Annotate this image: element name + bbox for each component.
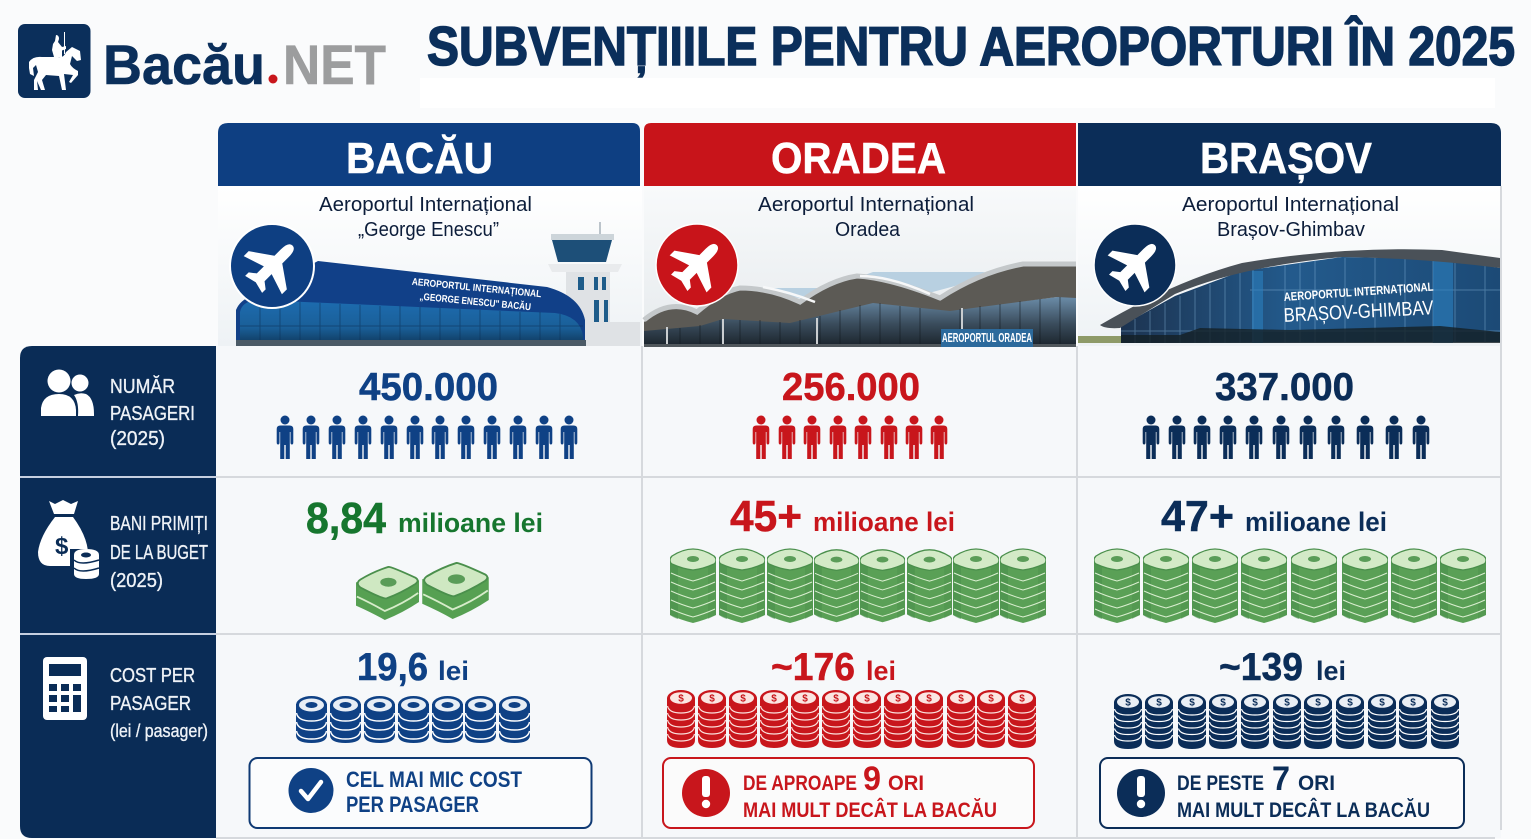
icon: check mark [288,768,334,813]
pictogram: coin stacks [296,696,530,743]
amount: 8,84 milioane lei: milioane lei [398,508,543,538]
number: 337.000 passengers: 337.000 [1215,366,1354,409]
amount: ~176 lei: lei [866,656,896,686]
text: Cost per pasager: COST PER [110,665,195,687]
text: Număr pasageri: PASAGERI [110,403,195,425]
text: building sign: AEROPORTUL INTERNAȚIONAL [411,277,542,300]
text: airport name: Aeroportul Internațional [758,194,974,216]
icon: horse and rider badge [18,24,90,98]
pictogram: coin stacks [1114,694,1459,749]
pictogram: coin stacks [667,690,1036,748]
text: lowest cost: CEL MAI MIC COST [346,767,522,792]
amount: 47+ milioane lei: 47+ [1161,492,1234,541]
row label: budget money [38,500,208,592]
text: Număr pasageri: (2025) [110,428,165,450]
pictogram: money stacks [670,549,1046,623]
heading: BACĂU: BACĂU [346,133,493,183]
text: building sign: AEROPORTUL INTERNAȚIONAL [1283,280,1434,304]
logo wordmark: NET [283,33,386,96]
text: building sign: BRAȘOV-GHIMBAV [1283,297,1435,327]
amount: 19,6 lei: lei [438,656,469,686]
text: Bani primiți de la buget [110,513,208,592]
icon: people [41,370,94,416]
amount: ~139 lei: ~139 [1219,646,1303,689]
text: nearly 9 times more: DE APROAPE [743,772,857,795]
logo wordmark [103,33,386,96]
row label: cost per passenger [43,657,208,741]
icon: airplane [656,224,738,306]
heading: ORADEA: ORADEA [771,134,946,183]
column: Bacău data [250,366,592,828]
text: more than 7 times: DE PESTE [1177,772,1264,795]
text: Bani primiți de la buget: BANI PRIMIȚI [110,513,208,535]
text: Cost per pasager: (lei / pasager) [110,721,208,741]
amount: 45+ milioane lei: milioane lei [813,507,955,537]
text: airport name [758,194,974,241]
icon: money bag: $ [55,533,69,560]
logo wordmark: Bacău [103,33,265,96]
amount: ~139 lei: lei [1316,656,1346,686]
number: 450.000 passengers: 450.000 [359,366,498,409]
pictogram: 12 passengers [277,416,577,459]
panel: Oradea column header and photo [644,123,1076,347]
text: airport name [1182,194,1399,241]
column: Brașov data [1094,366,1486,828]
text: Cost per pasager: PASAGER [110,693,191,715]
heading: BRAȘOV [1078,123,1501,186]
text: nearly 9 times more: ORI [888,772,924,795]
text: airport name: Brașov-Ghimbav [1217,219,1365,241]
heading: BRAȘOV: BRAȘOV [1200,134,1373,183]
panel: row labels sidebar [20,346,216,838]
logo: Bacău.NET [18,24,386,98]
text: more than 7 times [1177,760,1430,822]
pictogram: money stacks [356,563,489,620]
amount: 47+ milioane lei: milioane lei [1245,507,1387,537]
column: Oradea data [663,366,1046,828]
icon: money bag [38,500,102,582]
panel: Brașov column header and photo [1078,123,1501,346]
text: airport name: Aeroportul Internațional [1182,194,1399,216]
icon: exclamation [1117,769,1165,817]
text: Bani primiți de la buget: (2025) [110,570,163,592]
text: airport name [319,194,532,241]
text: Număr pasageri: NUMĂR [110,375,175,398]
heading: ORADEA [644,123,1076,186]
icon: airplane [230,224,314,308]
amount: 8,84 milioane lei [306,494,543,543]
text: more than 7 times: ORI [1298,772,1335,795]
text: lowest cost: PER PASAGER [346,792,479,817]
icon: exclamation [682,769,730,817]
row label: passengers [41,370,195,450]
text: building sign [410,277,542,314]
heading: BACĂU [218,123,640,186]
amount: 47+ milioane lei [1161,492,1387,541]
text: building sign [941,329,1033,347]
text: Număr pasageri [110,375,195,450]
amount: 19,6 lei: 19,6 [357,646,428,689]
amount: ~176 lei: ~176 [771,646,855,689]
icon: calculator [43,657,87,720]
photo: Brașov airport [1078,186,1500,346]
text: building sign: AEROPORTUL ORADEA [942,330,1032,345]
text: nearly 9 times more: 9 [863,760,881,798]
text: airport name: „George Enescu” [358,219,499,241]
text: Cost per pasager [110,665,208,741]
text: more than 7 times: MAI MULT DECÂT LA BACĂU [1177,798,1430,822]
amount: ~139 lei [1219,646,1346,689]
text: Bani primiți de la buget: DE LA BUGET [110,542,208,564]
number: 256.000 passengers: 256.000 [782,366,920,409]
callout: nearly 9 times [663,758,1034,828]
photo: Oradea airport [644,186,1076,347]
panel: table cells background [216,186,1501,838]
amount: 45+ milioane lei: 45+ [730,492,802,541]
panel: Bacău column header and photo [218,123,642,346]
text: more than 7 times: 7 [1272,760,1290,798]
pictogram: money stacks [1094,549,1486,623]
callout: more than 7 times [1100,758,1464,828]
pictogram: 11 passengers [1143,416,1429,459]
amount: 19,6 lei [357,646,469,689]
text: lowest cost [346,767,522,817]
text: airport name: Oradea [835,219,901,241]
text: building sign: „GEORGE ENESCU" BACĂU [419,290,532,313]
text: airport name: Aeroportul Internațional [319,194,532,216]
pictogram: 8 passengers [753,416,947,459]
text: building sign [1283,280,1435,327]
amount: 45+ milioane lei [730,492,955,541]
text: nearly 9 times more [743,760,997,822]
amount: 8,84 milioane lei: 8,84 [306,494,386,543]
text: nearly 9 times more: MAI MULT DECÂT LA BACĂU [743,798,997,822]
icon: airplane [1094,224,1176,306]
photo: Bacău airport [218,186,642,346]
callout: lowest cost [250,758,592,828]
